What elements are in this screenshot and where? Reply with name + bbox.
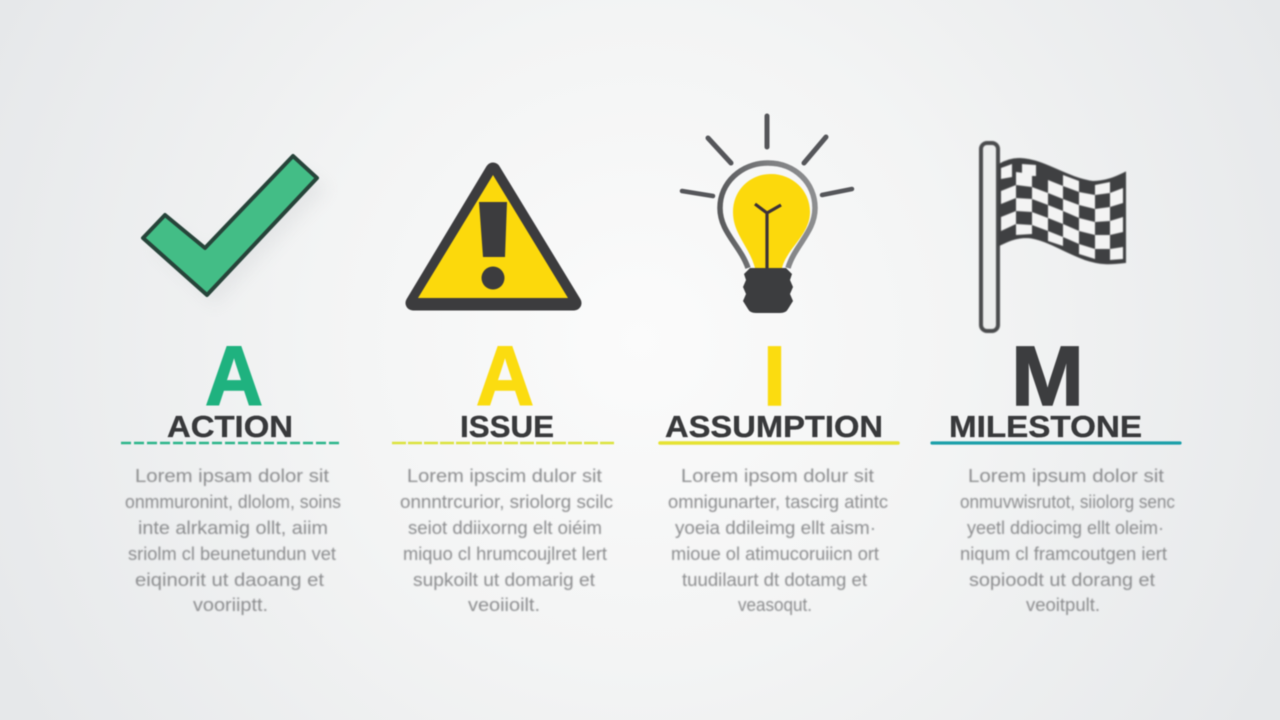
dashed rule: issue: [392, 442, 616, 444]
body text: action: onmmuronint, dlolom, soins: [125, 491, 341, 512]
body text: assumption: veasoqut.: [738, 594, 812, 615]
icon: light bulb: [682, 116, 852, 313]
letter A green: A: [205, 329, 263, 423]
letter M dark: M: [1011, 329, 1084, 423]
rule: milestone: [932, 441, 1180, 445]
heading: issue: ISSUE: [460, 409, 554, 444]
body text: milestone: Lorem ipsum dolor sit: [968, 465, 1164, 486]
body text: issue: veoiioilt.: [468, 594, 540, 615]
body text: issue: miquo cl hrumcoujlret lert: [403, 543, 607, 564]
panel: issue: [392, 329, 616, 615]
body text: action: inte alrkamig ollt, aiim: [138, 517, 328, 538]
icon: checkered flag: [981, 143, 1125, 331]
body text: issue: seiot ddiixorng elt oiéim: [408, 517, 602, 538]
heading: milestone: MILESTONE: [949, 409, 1142, 444]
body text: assumption: omnigunarter, tascirg atintc: [668, 491, 888, 512]
icon: warning triangle: [413, 170, 574, 303]
body text: assumption: yoeia ddileimg ellt aism·: [675, 517, 876, 538]
body text: milestone: niqum cl framcoutgen iert: [960, 543, 1167, 564]
panel: assumption: [660, 329, 898, 615]
body text: milestone: onmuvwisrutot, siiolorg senc: [960, 491, 1175, 512]
heading: assumption: ASSUMPTION: [665, 409, 883, 444]
body text: issue: supkoilt ut domarig et: [413, 569, 595, 590]
body text: assumption: [668, 465, 888, 615]
letter I yellow: I: [763, 329, 786, 423]
dashed rule: action: [121, 442, 340, 444]
body text: assumption: Lorem ipsom dolur sit: [681, 465, 874, 486]
body text: issue: [400, 465, 613, 615]
letter A yellow: A: [476, 329, 534, 423]
body text: issue: Lorem ipscim dulor sit: [407, 465, 602, 486]
body text: action: vooriiptt.: [193, 594, 268, 615]
body text: action: eiqinorit ut daoang et: [135, 569, 324, 590]
body text: action: sriolm cl beunetundun vet: [128, 543, 336, 564]
body text: assumption: mioue ol atimucoruiicn ort: [671, 543, 879, 564]
heading: action: ACTION: [167, 409, 293, 444]
panel: action: [121, 329, 341, 615]
body text: milestone: [960, 465, 1175, 615]
body text: assumption: tuudilaurt dt dotamg et: [682, 569, 867, 590]
icon: green check mark: [143, 156, 327, 305]
body text: action: Lorem ipsam dolor sit: [135, 465, 329, 486]
body text: action: [125, 465, 341, 615]
body text: milestone: veoitpult.: [1026, 594, 1100, 615]
rule: assumption: [660, 441, 898, 445]
body text: issue: onnntrcurior, sriolorg scilc: [400, 491, 613, 512]
body text: milestone: yeetl ddiocimg ellt oleim·: [967, 517, 1164, 538]
panel: milestone: [932, 329, 1180, 615]
body text: milestone: sopioodt ut dorang et: [969, 569, 1155, 590]
